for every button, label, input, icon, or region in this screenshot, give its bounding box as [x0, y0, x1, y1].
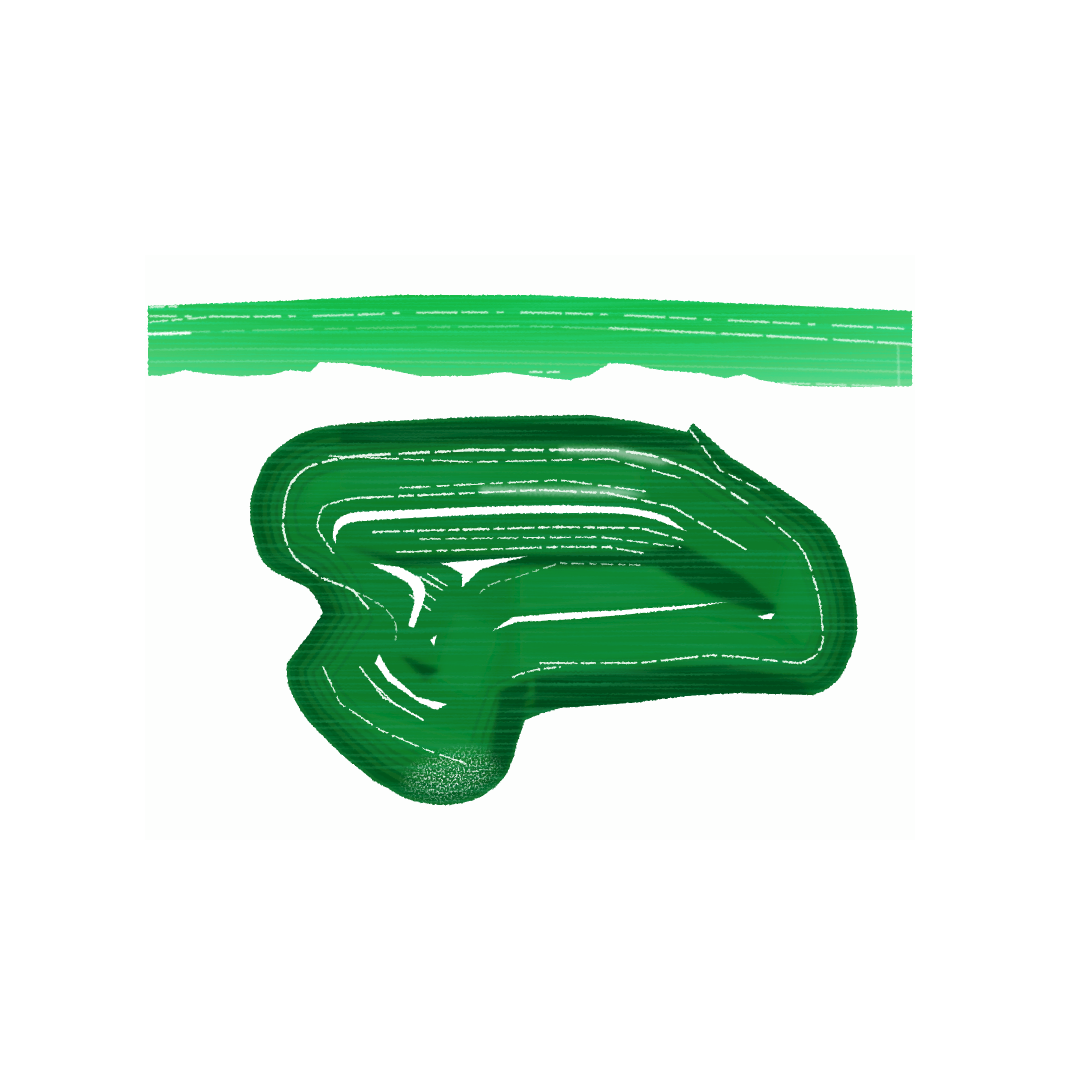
scanned sheet tint — [145, 255, 915, 840]
light green horizontal brush stroke — [140, 290, 920, 390]
white gaps between bristles — [283, 430, 823, 765]
bright mid-stroke patches — [300, 462, 840, 755]
small triangular gap — [430, 635, 437, 646]
dark green looping brush stroke — [240, 405, 870, 815]
fine bristle texture — [240, 405, 870, 815]
dark shadow bands — [285, 423, 810, 775]
worn dry-brush speckle — [398, 744, 506, 805]
stroke base colour — [240, 405, 870, 815]
pale dry-brush smears in upper loop — [480, 447, 675, 496]
concentric bristle rings along the outer edge — [250, 415, 857, 805]
small white tip at right turn — [757, 613, 775, 619]
thin white hairline along lower bend — [370, 680, 423, 720]
main white slit through upper loop — [333, 505, 687, 544]
artwork: green brush strokes on white — [148, 294, 912, 806]
bright centre re-laid over rings — [330, 470, 825, 755]
curved white gap in the zigzag — [370, 563, 425, 628]
white wedge under upper loop — [440, 556, 528, 587]
long white slit in lower band — [492, 602, 728, 631]
lower white slit in the zigzag — [375, 654, 447, 710]
